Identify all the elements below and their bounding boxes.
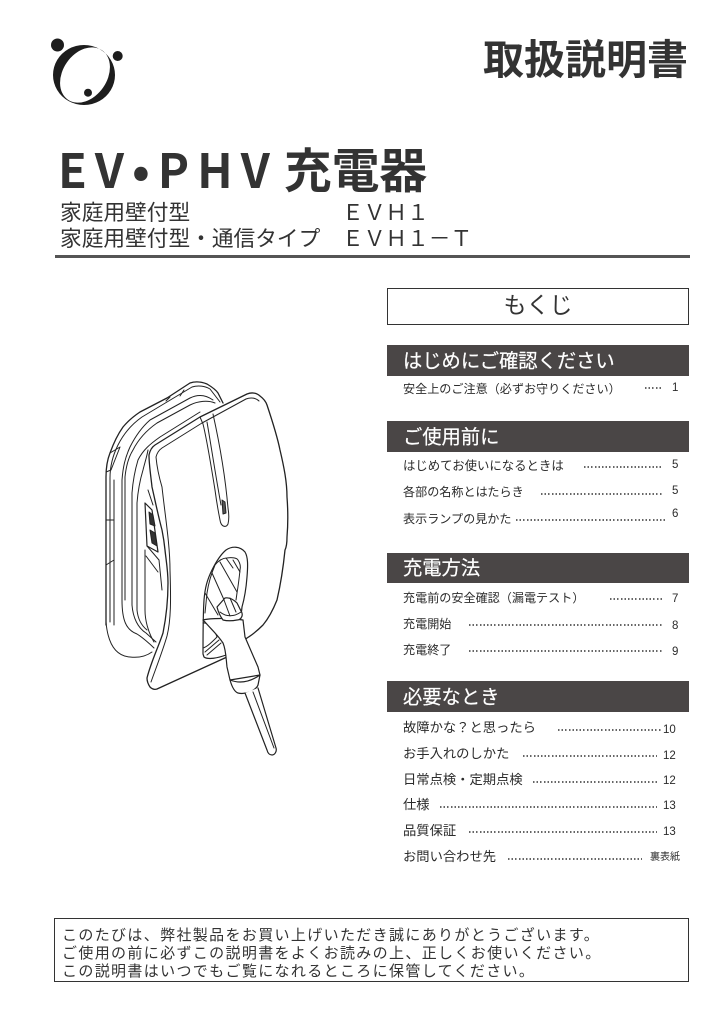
greeting line 1: このたびは、弊社製品をお買い上げいただき誠にありがとうございます。: [62, 927, 600, 944]
toc item: 12: [663, 750, 676, 762]
toc item: 各部の名称とはたらき: [403, 485, 524, 499]
toc item: [403, 591, 678, 605]
toc item: 1: [672, 382, 678, 394]
connector holder recess: [203, 547, 248, 658]
charging gun and cable: [203, 598, 276, 755]
toc item: 品質保証: [403, 823, 456, 838]
toc item: [403, 485, 678, 499]
toc item: 充電前の安全確認（漏電テスト）: [403, 591, 584, 605]
toc item: [403, 508, 678, 526]
front plate: [147, 393, 288, 689]
model line 1: [60, 200, 429, 225]
greeting message box: [54, 918, 689, 982]
toc item: 日常点検・定期点検: [403, 772, 523, 787]
toc item: 10: [663, 724, 676, 736]
toc item: 5: [672, 485, 678, 497]
contents heading box: [387, 288, 689, 325]
toc item: [403, 459, 678, 473]
toc item: [403, 720, 676, 736]
toc item: 充電終了: [403, 643, 451, 657]
toc item: 12: [663, 775, 676, 787]
toc item: [403, 617, 678, 632]
toc item: お問い合わせ先: [403, 849, 496, 864]
title rule: [55, 255, 690, 258]
manual heading: 取扱説明書: [483, 37, 688, 83]
toc item: [403, 823, 676, 838]
toc item: 13: [663, 826, 676, 838]
toc item: [403, 849, 680, 864]
section: 必要なとき: 必要なとき: [403, 687, 499, 708]
section: 必要なとき: [387, 681, 689, 712]
toc item: 裏表紙: [650, 852, 680, 863]
toc item: 6: [672, 508, 678, 520]
product title: [58, 133, 427, 202]
toc item: 5: [672, 459, 678, 471]
section: 充電方法: 充電方法: [403, 558, 480, 579]
section: はじめにご確認ください: [387, 345, 689, 376]
contents heading box: もくじ: [504, 292, 572, 318]
toc item: [403, 797, 676, 812]
toc item: 故障かな？と思ったら: [403, 720, 536, 735]
section: 充電方法: [387, 553, 689, 583]
section: はじめにご確認ください: はじめにご確認ください: [403, 351, 615, 372]
logo: [51, 38, 123, 105]
plate vertical slit: [200, 414, 229, 526]
toc item: [403, 746, 676, 762]
toc item: 8: [672, 620, 678, 632]
greeting line 2: ご使用の前に必ずこの説明書をよくお読みの上、正しくお使いください。: [62, 945, 602, 962]
product title: EV•PHV: [58, 133, 278, 202]
toc item: お手入れのしかた: [403, 746, 509, 761]
toc item: 7: [672, 593, 678, 605]
model line 2: 家庭用壁付型・通信タイプ: [60, 226, 320, 251]
text: ＥＶＨ１: [342, 200, 429, 225]
section: ご使用前に: ご使用前に: [403, 427, 499, 448]
toc item: はじめてお使いになるときは: [403, 459, 564, 473]
section: ご使用前に: [387, 421, 689, 452]
illustration: wall charger: [105, 381, 288, 756]
toc item: [403, 772, 676, 787]
toc item: 仕様: [403, 797, 430, 812]
back housing: [106, 382, 223, 657]
toc item: [403, 643, 678, 658]
text: 充電器: [284, 133, 427, 202]
side control panel: [145, 490, 162, 642]
model line 2: [60, 226, 472, 251]
plate inner edge: [151, 398, 259, 682]
text: ＥＶＨ１－Ｔ: [342, 226, 472, 251]
toc item: 安全上のご注意（必ずお守りください）: [403, 382, 621, 396]
toc item: 13: [663, 800, 676, 812]
toc item: 充電開始: [403, 617, 451, 631]
model line 1: 家庭用壁付型: [60, 200, 190, 225]
toc item: 9: [672, 646, 678, 658]
greeting line 3: この説明書はいつでもご覧になれるところに保管してください。: [62, 963, 535, 980]
toc item: 表示ランプの見かた: [403, 512, 511, 526]
